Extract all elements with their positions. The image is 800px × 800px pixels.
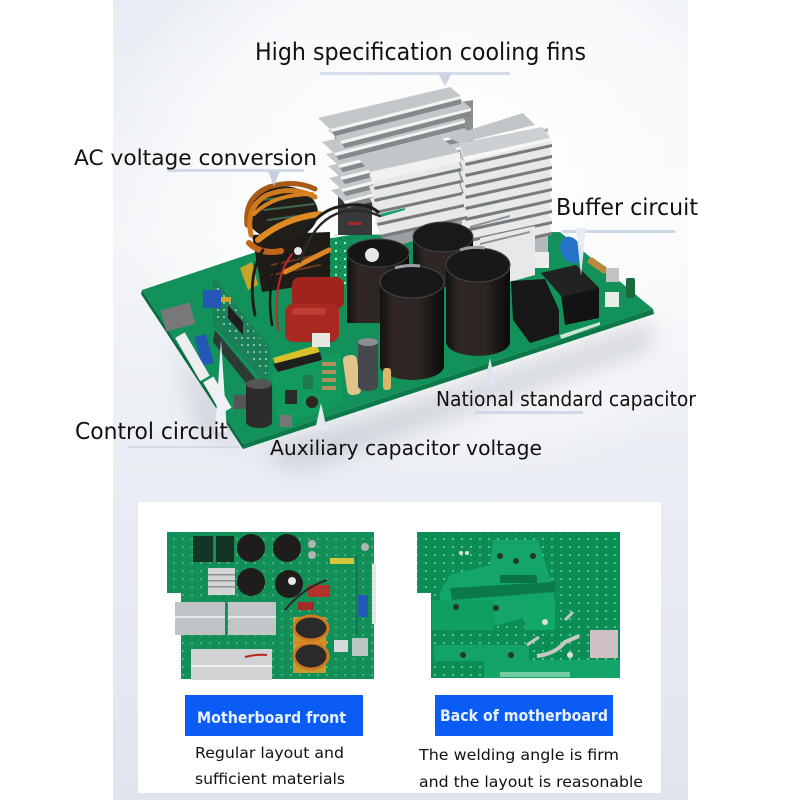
- heatsink: rear right fins: [447, 113, 552, 282]
- small parts: yellow transformer, resistors, small caps: [273, 333, 391, 396]
- label: back of motherboard: [435, 695, 613, 736]
- wiring harness: [252, 205, 380, 330]
- callout: control circuit: [75, 340, 240, 448]
- green circuit board: [141, 232, 654, 449]
- motherboard back photo: [417, 532, 620, 678]
- caption: back: [418, 746, 643, 791]
- callout: control circuit: Control circuit: [75, 419, 228, 445]
- motherboard front photo: [167, 532, 376, 680]
- label: motherboard front: Motherboard front: [197, 708, 346, 727]
- callout: auxiliary capacitor voltage: [270, 403, 542, 460]
- callout: national standard capacitor: National standard capacitor: [436, 387, 697, 411]
- main product photo: power board: [141, 87, 655, 470]
- black relays: [511, 265, 599, 343]
- callout: buffer circuit: Buffer circuit: [556, 195, 698, 221]
- buffer components: blue capacitor, resistor, connector: [556, 233, 635, 339]
- caption: front: Regular layout and: [195, 744, 344, 762]
- caption: front: sufficient materials: [195, 770, 345, 788]
- panel: motherboard comparison card: [138, 502, 661, 793]
- auxiliary daughter board: [272, 353, 343, 427]
- heatsink: front middle fins: [357, 135, 467, 250]
- callout: AC voltage conversion: AC voltage conversion: [74, 146, 317, 170]
- callout: auxiliary capacitor voltage: Auxiliary capacitor voltage: [270, 436, 542, 460]
- callout: national standard capacitor: [436, 358, 697, 414]
- callout: AC voltage conversion: [74, 146, 317, 186]
- board shadow: [175, 320, 655, 470]
- background panel: [113, 0, 688, 800]
- label: motherboard front: [185, 695, 363, 736]
- caption: front: [195, 744, 345, 788]
- callout: buffer circuit: [556, 195, 698, 276]
- callout: high specification cooling fins: [255, 38, 586, 86]
- red film capacitors: [285, 277, 344, 342]
- toroid coil: [246, 183, 330, 292]
- heatsink: rear left fins: [318, 87, 474, 235]
- caption: back: and the layout is reasonable: [419, 773, 643, 791]
- black electrolytic capacitors: [347, 222, 510, 380]
- callout: high specification cooling fins: High specification cooling fins: [255, 38, 586, 66]
- label: back of motherboard: Back of motherboard: [440, 706, 608, 725]
- caption: back: The welding angle is firm: [418, 746, 619, 764]
- control daughter board: [161, 277, 272, 428]
